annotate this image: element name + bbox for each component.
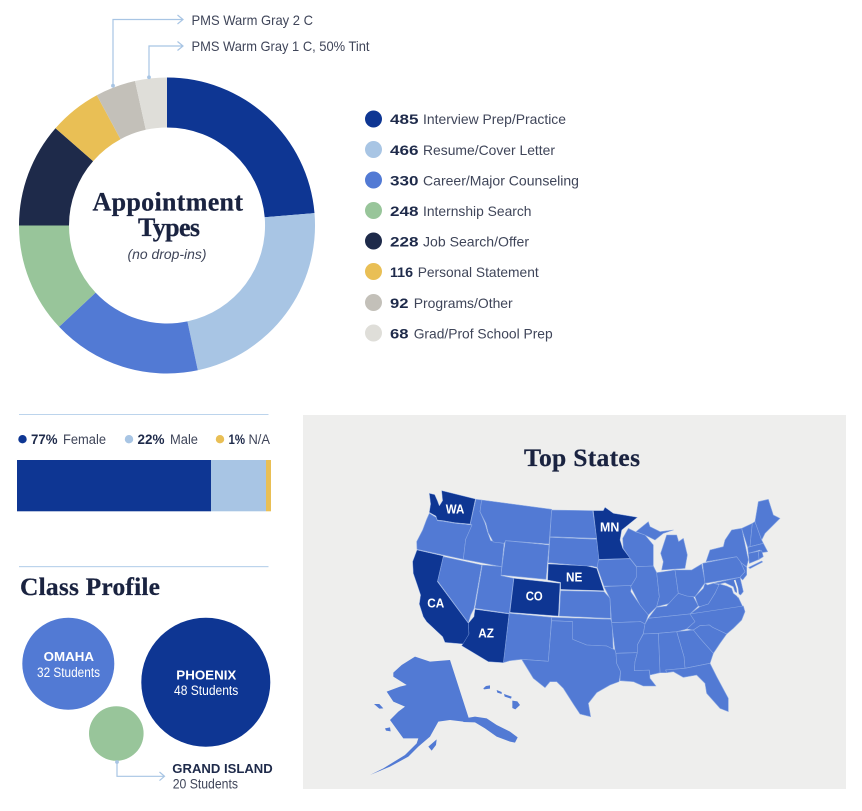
donut centre title: Appointment	[92, 188, 243, 216]
legend row: personal statement: 116	[390, 264, 413, 280]
state labels: NE	[566, 571, 582, 585]
legend row: personal statement: Personal Statement	[418, 264, 539, 280]
legend row: programs: 92	[390, 295, 409, 311]
state labels	[427, 502, 619, 641]
bubble: Grand Island	[89, 706, 273, 792]
legend row: resume: 466	[390, 142, 419, 158]
state labels: CO	[526, 590, 543, 604]
legend row: programs	[365, 294, 513, 311]
panel: top states	[303, 415, 846, 789]
donut centre title: Types	[138, 213, 200, 242]
highlighted state: Colorado	[510, 578, 560, 616]
highlighted state: California	[413, 550, 469, 644]
legend row: grad school: 68	[390, 326, 409, 342]
callout: PMS Warm Gray 2 C: PMS Warm Gray 2 C	[192, 12, 313, 28]
highlighted state: Arizona	[462, 609, 509, 663]
legend: appointment types	[365, 110, 579, 342]
map: United States	[370, 491, 780, 775]
gender legend: 77%	[31, 432, 58, 447]
legend row: internship search	[365, 202, 532, 219]
legend row: grad school: Grad/Prof School Prep	[414, 326, 553, 342]
donut chart: appointment types	[19, 77, 315, 374]
gender legend: N/A	[248, 432, 270, 447]
donut centre title	[92, 188, 243, 262]
highlighted state: Minnesota	[593, 507, 637, 559]
bubble: Phoenix: PHOENIX	[176, 668, 237, 683]
legend row: career counseling	[365, 172, 579, 188]
legend row: internship search: 248	[390, 203, 419, 219]
highlighted state: Nebraska	[548, 564, 604, 591]
bubble: Omaha: OMAHA	[44, 649, 95, 664]
legend row: job search	[365, 232, 529, 250]
gender legend: 22%	[138, 432, 164, 447]
legend row: job search: Job Search/Offer	[423, 234, 529, 250]
legend row: interview prep: 485	[390, 111, 419, 127]
legend row: grad school	[365, 324, 553, 342]
gender legend: Male	[170, 432, 198, 447]
highlighted state: Washington	[429, 491, 475, 524]
state labels: AZ	[478, 627, 494, 641]
Alaska	[370, 657, 518, 775]
bubble: Grand Island: GRAND ISLAND	[172, 761, 273, 776]
bubble: Grand Island: 20 Students	[173, 777, 238, 792]
state labels: MN	[600, 521, 619, 535]
stacked bar: gender split	[17, 460, 271, 511]
callout: PMS Warm Gray 1 C, 50% Tint	[147, 38, 370, 79]
bubble: Omaha: 32 Students	[37, 665, 100, 680]
heading: top states: Top States	[524, 443, 640, 472]
legend row: resume	[365, 141, 555, 158]
callout: PMS Warm Gray 1 C, 50% Tint: PMS Warm Gray 1 C, 50% Tint	[192, 38, 370, 54]
donut centre title: (no drop-ins)	[128, 246, 206, 262]
legend row: internship search: Internship Search	[423, 203, 532, 219]
legend row: personal statement	[365, 263, 539, 280]
callout: PMS Warm Gray 2 C	[111, 12, 313, 88]
legend row: programs: Programs/Other	[414, 295, 513, 311]
legend row: resume: Resume/Cover Letter	[423, 142, 555, 158]
legend row: career counseling: Career/Major Counseling	[423, 172, 579, 188]
bubble: Phoenix: 48 Students	[174, 683, 239, 698]
bubble: Phoenix	[141, 618, 270, 747]
Hawaii	[483, 685, 520, 709]
callouts: warm gray colour notes	[111, 12, 370, 88]
legend row: job search: 228	[390, 234, 419, 250]
heading: class profile: Class Profile	[20, 572, 160, 601]
state labels: CA	[427, 596, 444, 610]
gender legend: 1%	[228, 432, 245, 447]
gender legend: Female	[63, 432, 106, 447]
state labels: WA	[446, 502, 464, 516]
bubble: Omaha	[22, 618, 114, 710]
legend row: interview prep: Interview Prep/Practice	[423, 111, 566, 127]
legend row: career counseling: 330	[390, 172, 419, 188]
gender legend	[18, 432, 270, 447]
legend row: interview prep	[365, 110, 566, 128]
